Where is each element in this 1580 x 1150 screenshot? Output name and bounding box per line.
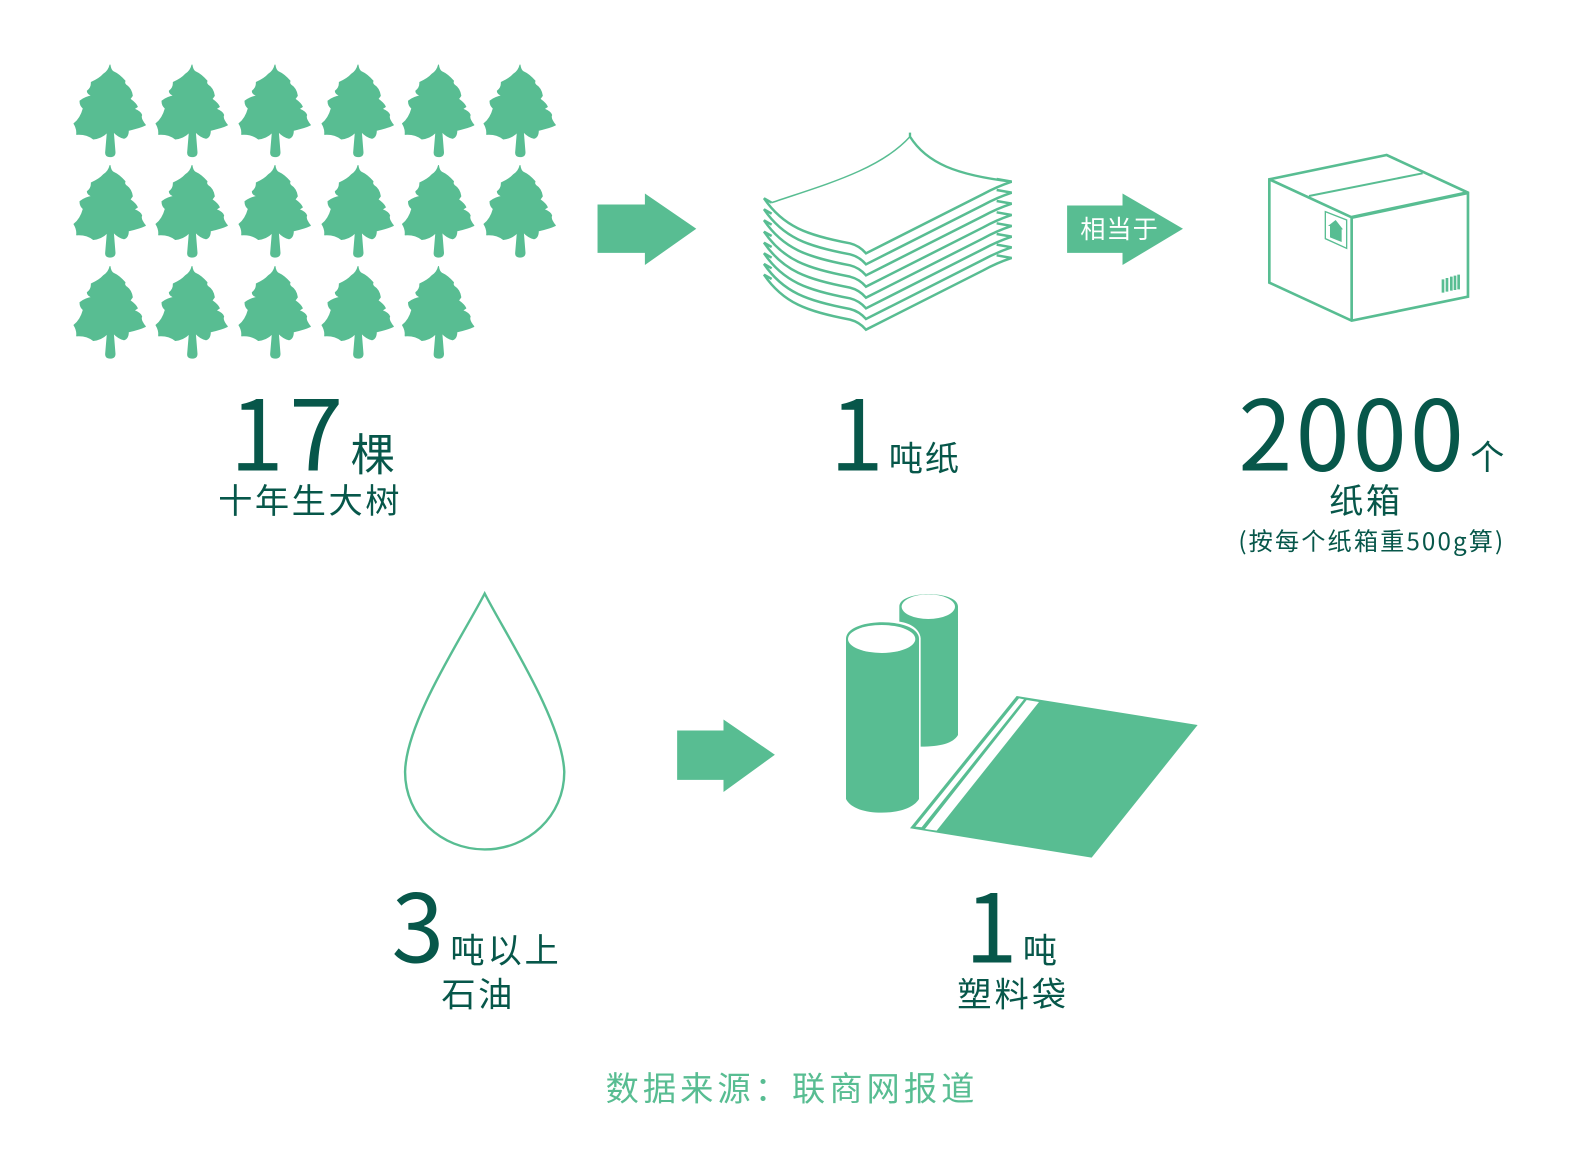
stat: 1 ton paper bbox=[830, 359, 961, 500]
bag bbox=[910, 696, 1198, 858]
stat: 1 ton paper: 吨纸 bbox=[889, 431, 961, 481]
source note: 数据来源：联商网报道 bbox=[606, 1061, 978, 1110]
stat: 17 trees bbox=[218, 359, 402, 523]
stat: 17 trees: 17 bbox=[230, 359, 349, 500]
stat: 1 ton plastic bag: 吨 bbox=[1023, 922, 1059, 972]
stat: 3 tons oil bbox=[391, 853, 562, 1017]
stat: 2000 boxes: (按每个纸箱重500g算) bbox=[1238, 522, 1505, 557]
icon: plastic rolls and bag bbox=[846, 594, 1198, 858]
stat: 17 trees: 十年生大树 bbox=[218, 473, 402, 523]
front roll bbox=[846, 622, 919, 813]
icon: oil drop bbox=[405, 594, 564, 849]
stat: 17 trees: 棵 bbox=[351, 420, 395, 484]
stat: 2000 boxes: 纸箱 bbox=[1329, 473, 1403, 523]
barcode bbox=[1443, 275, 1459, 293]
arrow: oil to plastic bbox=[677, 719, 775, 792]
icon: cardboard box bbox=[1269, 155, 1468, 321]
arrow with label: equivalent to bbox=[1067, 193, 1183, 265]
arrow label: 相当于 bbox=[1080, 210, 1159, 246]
tree group: 17 trees bbox=[74, 65, 555, 358]
arrow: trees to paper bbox=[598, 193, 696, 265]
stat: 3 tons oil: 3 bbox=[391, 853, 444, 990]
stat: 3 tons oil: 吨以上 bbox=[450, 922, 562, 972]
stat: 2000 boxes bbox=[1238, 359, 1506, 557]
stat: 1 ton plastic bag: 1 bbox=[965, 853, 1017, 990]
shipping label bbox=[1325, 212, 1347, 248]
stat: 1 ton paper: 1 bbox=[830, 359, 884, 500]
icon: paper stack bbox=[764, 133, 1012, 330]
back roll bbox=[899, 594, 958, 747]
stat: 1 ton plastic bag bbox=[957, 853, 1069, 1017]
all other elements bbox=[218, 193, 1506, 1110]
stat: 2000 boxes: 个 bbox=[1470, 430, 1506, 480]
stat: 3 tons oil: 石油 bbox=[441, 967, 515, 1017]
stat: 2000 boxes: 2000 bbox=[1238, 359, 1467, 500]
stat: 1 ton plastic bag: 塑料袋 bbox=[957, 967, 1069, 1017]
